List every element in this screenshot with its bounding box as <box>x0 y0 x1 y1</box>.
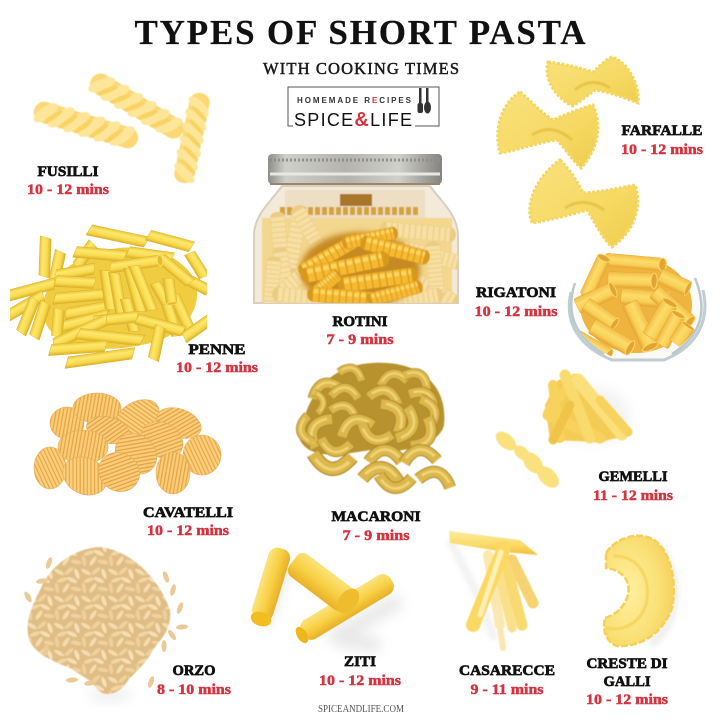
panel: ziti <box>249 545 401 689</box>
bow shading <box>532 82 610 210</box>
time: orzo: 8 - 10 mins <box>157 682 231 698</box>
label: penne: PENNE <box>188 342 246 358</box>
panel: fusilli <box>27 64 216 198</box>
label: macaroni: MACARONI <box>332 509 421 525</box>
label: creste di galli, line 1: CRESTE DI <box>586 656 668 672</box>
panel: rotini <box>254 154 458 348</box>
label: rigatoni: RIGATONI <box>476 285 556 301</box>
icon: fork and spoon <box>418 88 431 114</box>
logo wordmark: SPICE&LIFE <box>294 109 412 131</box>
pasta: gemelli <box>492 375 630 492</box>
pasta: fusilli <box>28 64 216 187</box>
pasta: orzo pile <box>23 547 188 703</box>
panel: farfalle <box>498 57 703 247</box>
panel: creste di galli <box>586 536 674 708</box>
label: rotini: ROTINI <box>332 314 388 330</box>
panel: casarecce <box>449 531 555 698</box>
label: ziti: ZITI <box>344 654 376 670</box>
pasta: penne pile <box>2 224 216 368</box>
rotini inside jar <box>262 190 457 309</box>
logo tagline: HOMEMADE RECIPES <box>297 96 412 105</box>
label: farfalle: FARFALLE <box>622 123 702 139</box>
panel: penne <box>2 224 258 376</box>
panel: gemelli <box>492 375 673 504</box>
single gemelli <box>492 428 563 492</box>
label: creste di galli, line 2: GALLI <box>604 674 651 690</box>
panel: rigatoni <box>474 253 705 362</box>
pasta: rigatoni in bowl <box>572 253 697 362</box>
time: casarecce: 9 - 11 mins <box>470 682 544 698</box>
time: rotini: 7 - 9 mins <box>326 332 394 348</box>
title: TYPES OF SHORT PASTA <box>134 13 586 52</box>
pasta: farfalle bows <box>498 57 638 247</box>
subtitle: WITH COOKING TIMES <box>263 59 459 78</box>
pasta: ziti tubes <box>249 545 400 645</box>
jar glass body <box>254 186 458 303</box>
pasta: creste di galli <box>604 536 674 646</box>
panel: orzo <box>23 547 231 703</box>
time: farfalle: 10 - 12 mins <box>621 142 703 158</box>
label: fusilli: FUSILLI <box>38 164 99 180</box>
logo: Spice and Life <box>288 87 439 131</box>
pasta: macaroni pile <box>298 363 453 490</box>
stray grains <box>23 557 188 688</box>
time: macaroni: 7 - 9 mins <box>342 528 410 544</box>
time: creste di galli: 10 - 12 mins <box>586 692 668 708</box>
glass bowl <box>569 290 705 360</box>
jar metal lid <box>268 154 442 184</box>
time: ziti: 10 - 12 mins <box>319 673 401 689</box>
label: gemelli: GEMELLI <box>598 469 668 485</box>
label: casarecce: CASARECCE <box>459 663 555 679</box>
time: rigatoni: 10 - 12 mins <box>474 304 558 320</box>
panel: cavatelli <box>34 392 233 539</box>
jar of rotini <box>254 154 458 309</box>
time: penne: 10 - 12 mins <box>176 360 258 376</box>
time: gemelli: 11 - 12 mins <box>593 488 673 504</box>
panel: macaroni <box>298 363 453 544</box>
time: fusilli: 10 - 12 mins <box>27 182 109 198</box>
label: cavatelli: CAVATELLI <box>143 505 233 521</box>
pasta: cavatelli <box>34 392 221 502</box>
footer website: SPICEANDLIFE.COM <box>318 704 404 715</box>
bowl rim <box>571 278 701 354</box>
time: cavatelli: 10 - 12 mins <box>147 523 229 539</box>
label: orzo: ORZO <box>172 663 216 679</box>
pasta: casarecce <box>449 531 538 648</box>
